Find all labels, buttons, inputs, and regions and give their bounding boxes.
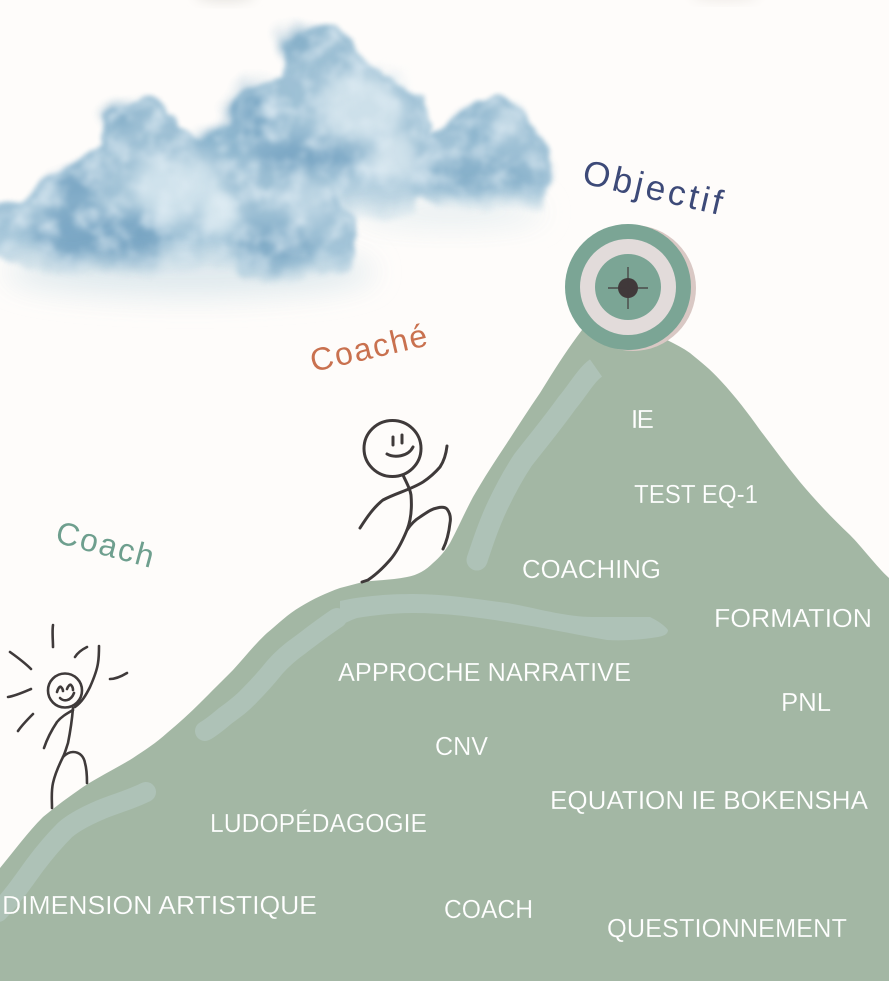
cloud — [0, 0, 759, 296]
mountain — [0, 330, 889, 981]
text: TEST EQ-1: TEST EQ-1 — [634, 479, 758, 509]
trail: lower path — [0, 792, 146, 912]
label: Coaché: Coaché — [306, 317, 431, 379]
text: EQUATION IE BOKENSHA: EQUATION IE BOKENSHA — [550, 785, 869, 815]
trail: upper path — [477, 368, 596, 560]
text: FORMATION: FORMATION — [714, 603, 872, 633]
text: IE: IE — [631, 404, 654, 434]
trail: middle path — [205, 618, 337, 731]
mountain labels — [2, 404, 872, 943]
figure: coaché climbing — [360, 420, 450, 582]
text: APPROCHE NARRATIVE: APPROCHE NARRATIVE — [338, 657, 631, 687]
label: Objectif: Objectif — [579, 153, 727, 223]
label: Coach: Coach — [52, 514, 158, 575]
figure: coach celebrating — [8, 625, 127, 808]
text: COACH: COACH — [444, 894, 533, 924]
text: DIMENSION ARTISTIQUE: DIMENSION ARTISTIQUE — [2, 890, 317, 920]
text: CNV: CNV — [435, 731, 489, 761]
text: PNL: PNL — [781, 687, 831, 717]
target icon — [565, 224, 696, 351]
trail: middle ridge path — [340, 594, 668, 640]
text: COACHING: COACHING — [522, 554, 661, 584]
text: QUESTIONNEMENT: QUESTIONNEMENT — [607, 913, 847, 943]
text: LUDOPÉDAGOGIE: LUDOPÉDAGOGIE — [210, 808, 427, 838]
